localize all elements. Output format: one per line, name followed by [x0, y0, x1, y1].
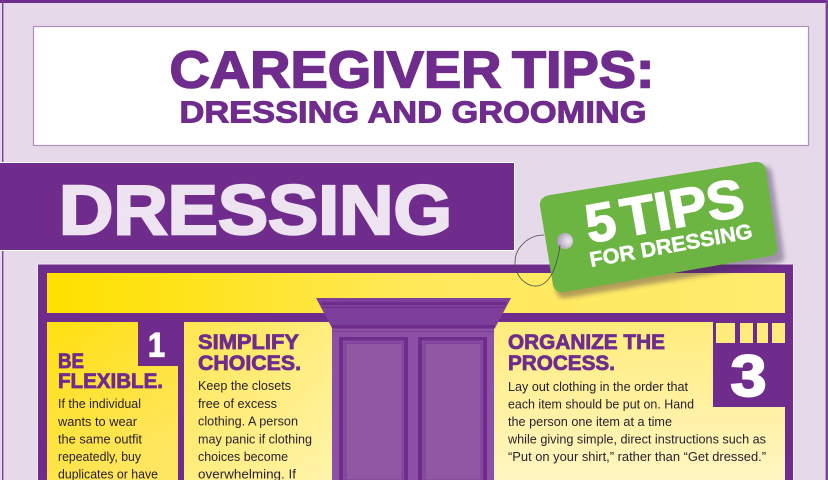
number badge 3 with closet shelves [713, 322, 785, 409]
body text: organize the process: the person one item at a time [508, 415, 672, 429]
body text: simplify choices [198, 379, 312, 480]
title: caregiver tips: CAREGIVER [170, 41, 502, 99]
section banner: dressing [0, 162, 515, 251]
tag text: 5 tips: 5 [581, 191, 621, 255]
price tag: 5 tips for dressing [515, 162, 784, 298]
body text: simplify choices: Keep the closets [198, 379, 291, 393]
number badge 1: 1 [148, 326, 165, 364]
main panel frame [37, 264, 794, 480]
tag string [515, 235, 560, 286]
section banner: dressing: DRESSING [59, 171, 452, 249]
subtitle: dressing and grooming: DRESSING AND GROOMING [180, 94, 646, 130]
tag body [540, 162, 777, 292]
body text: be flexible: repeatedly, buy [58, 450, 142, 464]
body text: simplify choices: clothing. A person [198, 414, 298, 428]
title: caregiver tips: TIPS: [512, 41, 654, 99]
heading: simplify choices: CHOICES. [198, 351, 301, 375]
yellow top band [47, 273, 785, 313]
title box [34, 26, 808, 146]
body text: be flexible: wants to wear [57, 415, 137, 429]
body text: be flexible: the same outfit [58, 432, 143, 446]
tag text: for dressing: FOR DRESSING [588, 220, 754, 272]
heading: be flexible [58, 349, 163, 393]
heading: organize the process: ORGANIZE THE [508, 330, 665, 354]
title: caregiver tips [170, 41, 654, 99]
tag hole [557, 233, 573, 249]
body text: simplify choices: choices become [198, 450, 288, 464]
body text: organize the process: while giving simple, direct instructions such as [507, 432, 766, 446]
wardrobe illustration [316, 298, 511, 480]
heading: organize the process [508, 330, 665, 375]
body text: be flexible: If the individual [58, 397, 141, 411]
heading: organize the process: PROCESS. [508, 351, 615, 375]
tag text: 5 tips: TIPS [616, 168, 749, 249]
tag shadow [553, 166, 784, 298]
body text: simplify choices: may panic if clothing [198, 432, 312, 446]
number badge 3 with closet shelves: 3 [730, 344, 766, 409]
panel: organize the process [494, 322, 785, 480]
body text: organize the process: Lay out clothing in the order that [508, 380, 689, 394]
number badge 1 [138, 322, 178, 366]
wardrobe door left [339, 337, 408, 480]
wardrobe door right [418, 337, 487, 480]
panel: be flexible [47, 322, 178, 480]
heading: simplify choices [198, 330, 301, 375]
heading: be flexible: BE [58, 349, 84, 373]
heading: simplify choices: SIMPLIFY [198, 330, 299, 354]
body text: organize the process [507, 380, 766, 464]
body text: organize the process: “Put on your shirt,” rather than “Get dressed.” [508, 450, 766, 464]
body text: organize the process: each item should be put on. Hand [508, 398, 694, 412]
body text: simplify choices: free of excess [198, 397, 277, 411]
panel: simplify choices [184, 322, 334, 480]
body text: be flexible [57, 397, 158, 480]
heading: be flexible: FLEXIBLE. [58, 369, 163, 393]
